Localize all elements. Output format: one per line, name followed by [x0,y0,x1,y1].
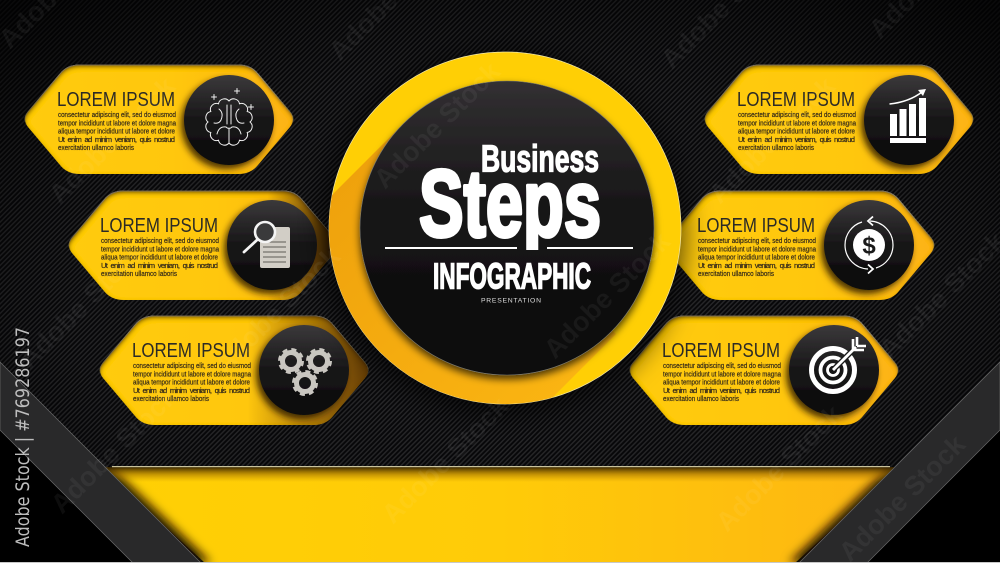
heading: LOREM IPSUM [662,340,780,362]
body text: consectetur adipiscing elit, sed do eiusmod [58,110,176,119]
body text: tempor incididunt ut labore et dolore magna [133,369,252,378]
title: Business: Business [481,138,599,180]
icon disc [824,200,914,290]
body text [698,236,817,278]
black inner disc [360,81,654,375]
stock id vertical text: Adobe Stock | #769286197 [12,327,34,547]
body text: aliqua tempor incididunt ut labore et dolore [58,127,175,136]
icon: magnifier and document [244,222,290,268]
body text [101,236,220,278]
title: INFOGRAPHIC: INFOGRAPHIC [433,256,591,296]
body text: exercitation ullamco laboris [58,143,134,152]
body text: tempor incididunt ut labore et dolore magna [698,244,817,253]
body text: consectetur adipiscing elit, sed do eiusmod [133,361,251,370]
heading: LOREM IPSUM [57,89,175,111]
body text: consectetur adipiscing elit, sed do eiusmod [663,361,781,370]
body text [133,361,252,403]
icon: dollar coin with cycle arrows [845,216,893,274]
body text: aliqua tempor incididunt ut labore et dolore [663,378,780,387]
body text: Ut enim ad minim veniam, quis nostrud [663,386,780,395]
title: Steps: Steps [419,151,601,257]
watermarks: Adobe Stock [13,236,152,374]
icon disc [184,75,274,165]
body text: Ut enim ad minim veniam, quis nostrud [58,135,175,144]
icon: target with arrow [812,337,866,392]
watermarks: Adobe Stock [710,399,849,537]
body text: exercitation ullamco laboris [133,394,209,403]
body text: Ut enim ad minim veniam, quis nostrud [698,261,815,270]
body text: exercitation ullamco laboris [698,269,774,278]
body text: Ut enim ad minim veniam, quis nostrud [101,261,218,270]
icon: gears [280,350,330,394]
body text: aliqua tempor incididunt ut labore et dolore [698,253,815,262]
body text: tempor incididunt ut labore et dolore magna [738,118,857,127]
watermarks: Adobe Stock [538,226,677,364]
icon disc [789,325,879,415]
body text: exercitation ullamco laboris [738,143,814,152]
body text [58,110,177,152]
card 1: brain [25,65,293,174]
bottom yellow panel [106,466,894,562]
heading: LOREM IPSUM [737,89,855,111]
body text [738,110,857,152]
subtitle: PRESENTATION: PRESENTATION [481,298,541,304]
icon disc [864,75,954,165]
body text: consectetur adipiscing elit, sed do eiusmod [101,236,219,245]
watermarks: Adobe Stock [703,71,842,209]
card 2: search [69,191,337,300]
icon disc [259,325,349,415]
long shadow on ring [329,130,616,404]
heading: LOREM IPSUM [132,340,250,362]
yellow ring [329,52,681,404]
soft shadow behind ring [323,54,683,414]
watermarks: Adobe Stock [368,56,507,194]
watermarks: Adobe Stock [376,391,515,529]
icon: dollar coin with cycle arrows: $ [862,232,876,260]
right diagonal band [799,362,1000,563]
card 5: dollar cycle [666,191,934,300]
body text: aliqua tempor incididunt ut labore et dolore [101,253,218,262]
body text: exercitation ullamco laboris [101,269,177,278]
heading: LOREM IPSUM [100,215,218,237]
icon disc [227,200,317,290]
body text [663,361,782,403]
card 4: growth chart [705,65,973,174]
bottom edge line [0,562,1000,563]
body text: aliqua tempor incididunt ut labore et dolore [133,378,250,387]
body text: consectetur adipiscing elit, sed do eiusmod [738,110,856,119]
icon: brain [206,88,254,145]
divider rules [385,247,633,249]
heading: LOREM IPSUM [697,215,815,237]
watermarks: Adobe Stock [43,71,182,209]
card 6: target [630,316,898,425]
body text: Ut enim ad minim veniam, quis nostrud [738,135,855,144]
watermarks: Adobe Stock [45,381,184,519]
body text: tempor incididunt ut labore et dolore magna [101,244,220,253]
body text: aliqua tempor incididunt ut labore et dolore [738,127,855,136]
body text: consectetur adipiscing elit, sed do eiusmod [698,236,816,245]
left diagonal band [0,362,201,563]
body text: Ut enim ad minim veniam, quis nostrud [133,386,250,395]
icon: bar chart with arrow [890,89,926,143]
card 3: gears [100,316,368,425]
body text: exercitation ullamco laboris [663,394,739,403]
central circle [306,50,705,420]
watermarks: Adobe Stock [208,241,347,379]
body text: tempor incididunt ut labore et dolore magna [663,369,782,378]
body text: tempor incididunt ut labore et dolore magna [58,118,177,127]
